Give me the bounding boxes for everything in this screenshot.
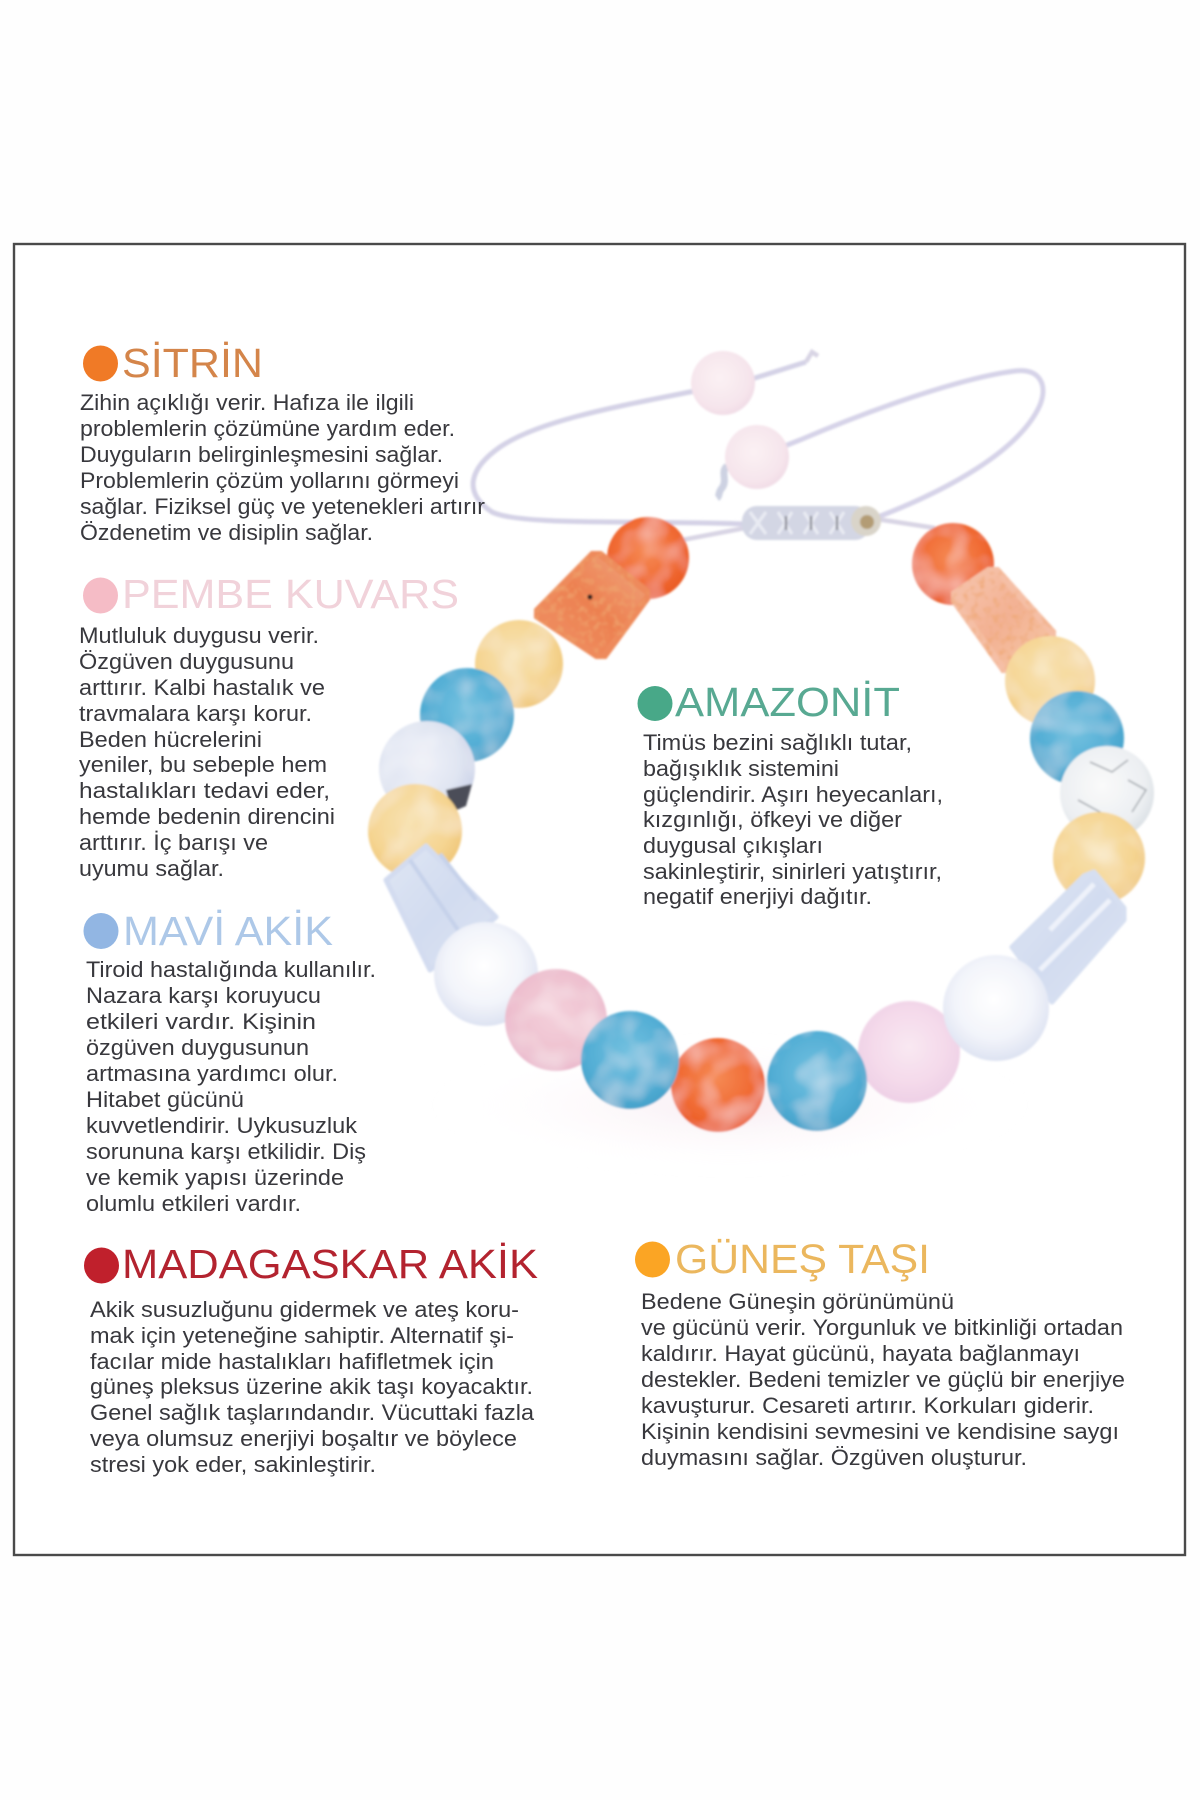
right blue bead <box>1030 691 1124 785</box>
heading: Amazonit: AMAZONİT <box>675 679 900 725</box>
right sunstone tube <box>951 567 1056 673</box>
body: Madagaskar Akik: facılar mide hastalıkları hafifletmek için <box>90 1349 494 1374</box>
body: Mavi Akik: kuvvetlendirir. Uykusuzluk <box>86 1113 358 1138</box>
body: Madagaskar Akik: veya olumsuz enerjiyi boşaltır ve böylece <box>90 1426 517 1451</box>
panel: Pembe Kuvars <box>79 571 459 881</box>
body: Madagaskar Akik: güneş pleksus üzerine akik taşı koyacaktır. <box>90 1374 533 1399</box>
body: Pembe Kuvars: Mutluluk duygusu verir. <box>79 623 319 648</box>
body: Sitrin: Zihin açıklığı verir. Hafıza ile ilgili <box>80 390 414 415</box>
body: Amazonit: sakinleştirir, sinirleri yatıştırır, <box>643 859 942 884</box>
heading: Pembe Kuvars: PEMBE KUVARS <box>122 571 459 617</box>
body: Amazonit: güçlendirir. Aşırı heyecanları, <box>643 782 943 807</box>
body: Sitrin: Duyguların belirginleşmesini sağlar. <box>80 442 443 467</box>
body: Mavi Akik: ve kemik yapısı üzerinde <box>86 1165 344 1190</box>
cord tip knot <box>717 466 727 498</box>
cord: left loop <box>473 362 806 524</box>
howlite bead <box>1060 746 1154 840</box>
body: Güneş Taşı: kavuşturur. Cesareti artırır. Korkuları giderir. <box>641 1393 1094 1418</box>
body: Mavi Akik <box>86 957 376 1216</box>
body: Pembe Kuvars: hastalıkları tedavi eder, <box>79 778 330 803</box>
body: Mavi Akik: Nazara karşı koruyucu <box>86 983 321 1008</box>
sliding knot <box>742 506 881 540</box>
left blue bead <box>420 668 514 762</box>
right white bead <box>943 955 1049 1061</box>
body: Mavi Akik: sorununa karşı etkilidir. Diş <box>86 1139 366 1164</box>
panel: Mavi Akik <box>84 908 376 1216</box>
body: Sitrin: Özdenetim ve disiplin sağlar. <box>80 520 373 545</box>
icon: red dot <box>84 1248 119 1284</box>
icon: pink dot <box>83 578 118 614</box>
heading: Sitrin: SİTRİN <box>122 340 263 386</box>
body: Mavi Akik: özgüven duygusunun <box>86 1035 309 1060</box>
body: Mavi Akik: artmasına yardımcı olur. <box>86 1061 338 1086</box>
body: Pembe Kuvars: yeniler, bu sebeple hem <box>79 752 327 777</box>
body: Güneş Taşı: kaldırır. Hayat gücünü, hayata bağlanmayı <box>641 1341 1080 1366</box>
body: Madagaskar Akik: Genel sağlık taşlarındandır. Vücuttaki fazla <box>90 1400 534 1425</box>
body: Pembe Kuvars: Özgüven duygusunu <box>79 649 294 674</box>
left lace agate tube <box>386 846 496 970</box>
heading: Güneş Taşı: GÜNEŞ TAŞI <box>675 1236 930 1282</box>
body: Pembe Kuvars: arttırır. İç barışı ve <box>79 830 268 855</box>
body: Pembe Kuvars: uyumu sağlar. <box>79 856 224 881</box>
body: Madagaskar Akik <box>90 1297 534 1477</box>
icon: green dot <box>638 686 672 721</box>
right orange bead <box>912 523 994 605</box>
heading: Mavi Akik: MAVİ AKİK <box>123 908 333 954</box>
cord: tail ends <box>682 352 935 540</box>
cord: right loop <box>757 371 1043 520</box>
body: Madagaskar Akik: Akik susuzluğunu gidermek ve ateş koru- <box>90 1297 519 1322</box>
left sunstone tube <box>534 551 650 659</box>
soft shadow under bracelet <box>430 1033 1030 1177</box>
body: Pembe Kuvars <box>79 623 335 881</box>
body: Sitrin: Problemlerin çözüm yollarını görmeyi <box>80 468 459 493</box>
body: Mavi Akik: Hitabet gücünü <box>86 1087 244 1112</box>
body: Sitrin: problemlerin çözümüne yardım eder. <box>80 416 455 441</box>
body: Güneş Taşı: Kişinin kendisini sevmesini ve kendisine saygı <box>641 1419 1119 1444</box>
right yellow bead <box>1005 636 1095 726</box>
body: Güneş Taşı: duymasını sağlar. Özgüven oluşturur. <box>641 1445 1027 1470</box>
body: Madagaskar Akik: stresi yok eder, sakinleştirir. <box>90 1452 376 1477</box>
bottom right blue bead <box>767 1031 867 1131</box>
body: Amazonit <box>643 730 943 909</box>
body: Mavi Akik: etkileri vardır. Kişinin <box>86 1009 316 1034</box>
cord bead 2 <box>725 425 789 489</box>
body: Amazonit: bağışıklık sistemini <box>643 756 839 781</box>
left yellow bead <box>475 620 563 708</box>
panel: Amazonit <box>638 679 943 909</box>
icon: orange dot <box>83 346 118 382</box>
frame <box>14 244 1185 1555</box>
panel: Sitrin <box>80 340 486 545</box>
pink bead <box>505 969 607 1071</box>
body: Güneş Taşı: destekler. Bedeni temizler ve güçlü bir enerjiye <box>641 1367 1125 1392</box>
body: Pembe Kuvars: Beden hücrelerini <box>79 727 262 752</box>
body: Güneş Taşı: Bedene Güneşin görünümünü <box>641 1289 954 1314</box>
body: Sitrin: sağlar. Fiziksel güç ve yetenekleri artırır <box>80 494 486 519</box>
bracelet photo <box>368 351 1154 1177</box>
bottom left blue bead <box>581 1011 679 1109</box>
body: Mavi Akik: olumlu etkileri vardır. <box>86 1191 301 1216</box>
body: Amazonit: negatif enerjiyi dağıtır. <box>643 884 872 909</box>
centre orange bead <box>671 1038 765 1132</box>
icon: amber dot <box>635 1242 670 1278</box>
left grey-white bead <box>379 721 475 817</box>
icon: blue dot <box>84 913 118 949</box>
left white bead <box>434 922 538 1026</box>
body: Pembe Kuvars: travmalara karşı korur. <box>79 701 312 726</box>
body: Amazonit: kızgınlığı, öfkeyi ve diğer <box>643 807 903 832</box>
body: Amazonit: Timüs bezini sağlıklı tutar, <box>643 730 912 755</box>
heading: Madagaskar Akik: MADAGASKAR AKİK <box>122 1241 538 1287</box>
lilac bead <box>858 1001 960 1103</box>
body: Güneş Taşı: ve gücünü verir. Yorgunluk ve bitkinliği ortadan <box>641 1315 1123 1340</box>
body: Sitrin <box>80 390 486 545</box>
panel: Madagaskar Akik <box>84 1241 538 1477</box>
left orange bead <box>607 517 689 599</box>
body: Pembe Kuvars: arttırır. Kalbi hastalık ve <box>79 675 325 700</box>
body: Güneş Taşı <box>641 1289 1125 1470</box>
right lace agate tube <box>1012 872 1124 1002</box>
panel: Güneş Taşı <box>635 1236 1125 1470</box>
body: Madagaskar Akik: mak için yeteneğine sahiptir. Alternatif şi- <box>90 1323 514 1348</box>
body: Mavi Akik: Tiroid hastalığında kullanılır. <box>86 957 376 982</box>
right yellow bead lower <box>1053 812 1145 904</box>
body: Amazonit: duygusal çıkışları <box>643 833 823 858</box>
cord bead 1 <box>691 351 755 415</box>
body: Pembe Kuvars: hemde bedenin direncini <box>79 804 335 829</box>
left lower yellow bead <box>368 784 462 878</box>
